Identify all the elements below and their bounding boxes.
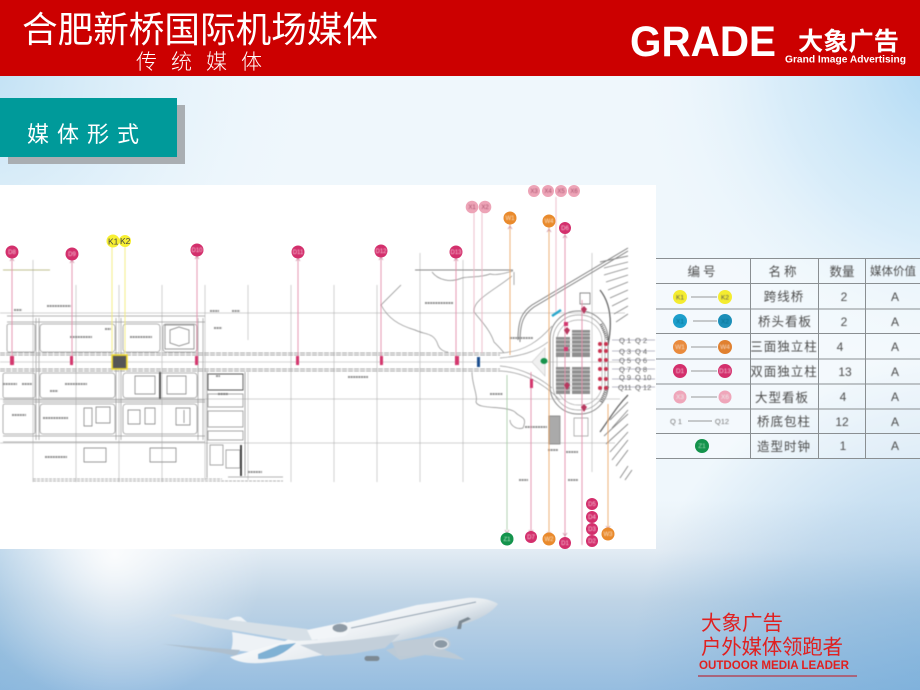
legend icons: Q 1 — [670, 417, 682, 426]
column labels for under-bridge pillars: Q 3 — [619, 347, 631, 356]
table text: 桥头看板 — [758, 315, 812, 329]
pink double-sided pillar markers: D1 — [561, 541, 569, 547]
pink double-sided pillar markers: D3 — [588, 527, 596, 533]
legend icons: X3 — [676, 394, 684, 401]
icon: far engine — [392, 637, 450, 656]
icon: far wing — [386, 640, 465, 660]
orange three-sided pillar markers: W4 — [544, 219, 554, 225]
brand logo: 大象广告 — [798, 28, 899, 56]
pink double-sided pillar markers: D13 — [450, 250, 462, 256]
yellow bridge markers — [106, 234, 131, 248]
pink double-sided pillar markers: D6 — [561, 226, 569, 232]
legend icons: D1 — [676, 368, 685, 375]
table text: 12 — [835, 415, 849, 429]
section tag: media format — [0, 98, 185, 164]
column labels for under-bridge pillars: Q 4 — [635, 347, 647, 356]
subtitle: 传统媒体 — [136, 51, 262, 74]
brand logo: Grand Image Advertising — [785, 54, 906, 66]
icon: upper fin — [228, 617, 247, 622]
table text: 双面独立柱 — [750, 364, 818, 379]
table text: 1 — [840, 439, 847, 453]
pink double-sided pillar markers: D8 — [8, 250, 16, 256]
table text: 造型时钟 — [757, 439, 811, 454]
table text: 4 — [837, 340, 844, 354]
table text: 大型看板 — [755, 391, 809, 405]
legend icons: X1 — [676, 318, 684, 326]
green clock marker — [500, 532, 514, 546]
building north and south — [580, 293, 590, 304]
column labels for under-bridge pillars: Q 8 — [635, 365, 647, 374]
panel: airport site plan — [0, 185, 656, 549]
table text: A — [891, 315, 899, 329]
pink double-sided pillar markers: D7 — [527, 535, 535, 541]
table grid — [656, 258, 920, 459]
table text: 桥底包柱 — [757, 414, 811, 429]
icon: horizontal stabilizer — [162, 644, 240, 656]
header banner — [0, 0, 920, 76]
table text: 名称 — [768, 264, 800, 279]
column labels for under-bridge pillars: Q 5 — [619, 356, 631, 365]
icon: fuselage — [230, 598, 498, 663]
brand logo — [630, 18, 906, 66]
table text: A — [891, 415, 899, 429]
title: 合肥新桥国际机场媒体 — [22, 10, 378, 50]
legend connectors — [688, 297, 717, 421]
orange three-sided pillar markers: W2 — [544, 537, 554, 543]
table text: A — [891, 365, 899, 379]
table text: 2 — [841, 290, 848, 304]
table text: 13 — [838, 365, 852, 379]
column labels for under-bridge pillars: Q 9 — [619, 373, 631, 382]
light pink billboard markers: X3 — [530, 189, 538, 195]
table text: 数量 — [829, 264, 855, 279]
column labels for under-bridge pillars: Q11 — [618, 383, 632, 392]
pink double-sided pillar markers: D11 — [293, 250, 304, 256]
terminal approach — [500, 326, 560, 400]
column labels for under-bridge pillars: Q 6 — [635, 356, 647, 365]
road site markers — [10, 306, 608, 412]
column labels for under-bridge pillars: Q 12 — [635, 383, 651, 392]
orange three-sided pillar markers: W3 — [604, 532, 613, 538]
section tag: media format: 媒体形式 — [27, 122, 139, 147]
column labels for under-bridge pillars: Q 1 — [619, 336, 631, 345]
legend icons: W4 — [720, 344, 730, 351]
orange three-sided pillar markers: W1 — [506, 216, 515, 222]
icon: belly and wing root — [300, 634, 400, 656]
legend icons: W1 — [675, 344, 685, 351]
pink double-sided pillar markers — [6, 222, 598, 549]
green clock marker: Z1 — [503, 537, 511, 543]
table text — [687, 264, 916, 454]
icon: landing gear — [364, 617, 471, 661]
slogan: 大象广告 — [701, 612, 783, 635]
light pink billboard markers: X6 — [570, 189, 578, 195]
legend icons: K2 — [721, 294, 729, 302]
light pink billboard markers — [466, 185, 580, 213]
slogan: 户外媒体领跑者 — [701, 636, 843, 659]
brand logo: GRADE — [630, 18, 776, 66]
legend icons: K1 — [676, 294, 684, 302]
table text: 2 — [841, 315, 848, 329]
slogan — [698, 612, 857, 677]
yellow bridge markers: K1 — [108, 236, 119, 246]
table text: A — [891, 340, 899, 354]
light pink billboard markers: X1 — [468, 205, 476, 211]
icon: near engine — [307, 622, 350, 640]
panel: media table — [656, 258, 920, 459]
table text: 媒体价值 — [870, 264, 916, 278]
legend icons: X6 — [721, 394, 729, 401]
table text: 三面独立柱 — [750, 339, 818, 354]
table text: 编号 — [687, 264, 719, 279]
city blocks — [3, 324, 197, 434]
plan linework — [0, 248, 632, 482]
pink double-sided pillar markers: D9 — [68, 252, 76, 258]
pink double-sided pillar markers: D4 — [588, 515, 596, 521]
legend icons: D13 — [719, 368, 731, 375]
legend icons — [670, 290, 732, 453]
lake outlines — [415, 269, 513, 271]
table text: A — [891, 390, 899, 404]
slogan: OUTDOOR MEDIA LEADER — [699, 660, 850, 672]
yellow bridge markers: K2 — [120, 236, 131, 246]
loop road — [550, 311, 608, 414]
legend icons: Q12 — [715, 417, 729, 426]
icon: near wing — [168, 614, 318, 641]
media pointer lines — [10, 197, 655, 545]
orange three-sided pillar markers — [504, 212, 614, 546]
pink double-sided pillar markers: D2 — [588, 539, 596, 545]
light pink billboard markers: X5 — [557, 189, 565, 195]
table text: 4 — [840, 390, 847, 404]
airplane — [162, 598, 498, 663]
icon: tail fin — [231, 632, 290, 653]
main road — [0, 353, 500, 371]
column labels for under-bridge pillars: Q 10 — [635, 373, 651, 382]
legend icons: X2 — [721, 318, 729, 326]
parking lots — [556, 330, 590, 394]
light pink billboard markers: X4 — [544, 189, 552, 195]
column labels for under-bridge pillars: Q 2 — [635, 336, 647, 345]
column labels for under-bridge pillars: Q 7 — [619, 365, 631, 374]
illegible plan annotations rendered as smudges — [3, 303, 578, 480]
table text: 跨线桥 — [764, 290, 804, 304]
pink double-sided pillar markers: D10 — [191, 248, 203, 254]
pink double-sided pillar markers: D12 — [375, 249, 387, 255]
icon: tail livery — [258, 643, 296, 659]
buildings — [84, 325, 194, 462]
column labels for under-bridge pillars — [618, 336, 651, 392]
legend icons: Z1 — [698, 443, 706, 450]
table text: A — [891, 290, 899, 304]
light pink billboard markers: X2 — [481, 205, 489, 211]
table text: A — [891, 439, 899, 453]
curved road and housing — [600, 290, 628, 432]
pink double-sided pillar markers: D5 — [588, 502, 596, 508]
icon: window line — [351, 602, 476, 628]
